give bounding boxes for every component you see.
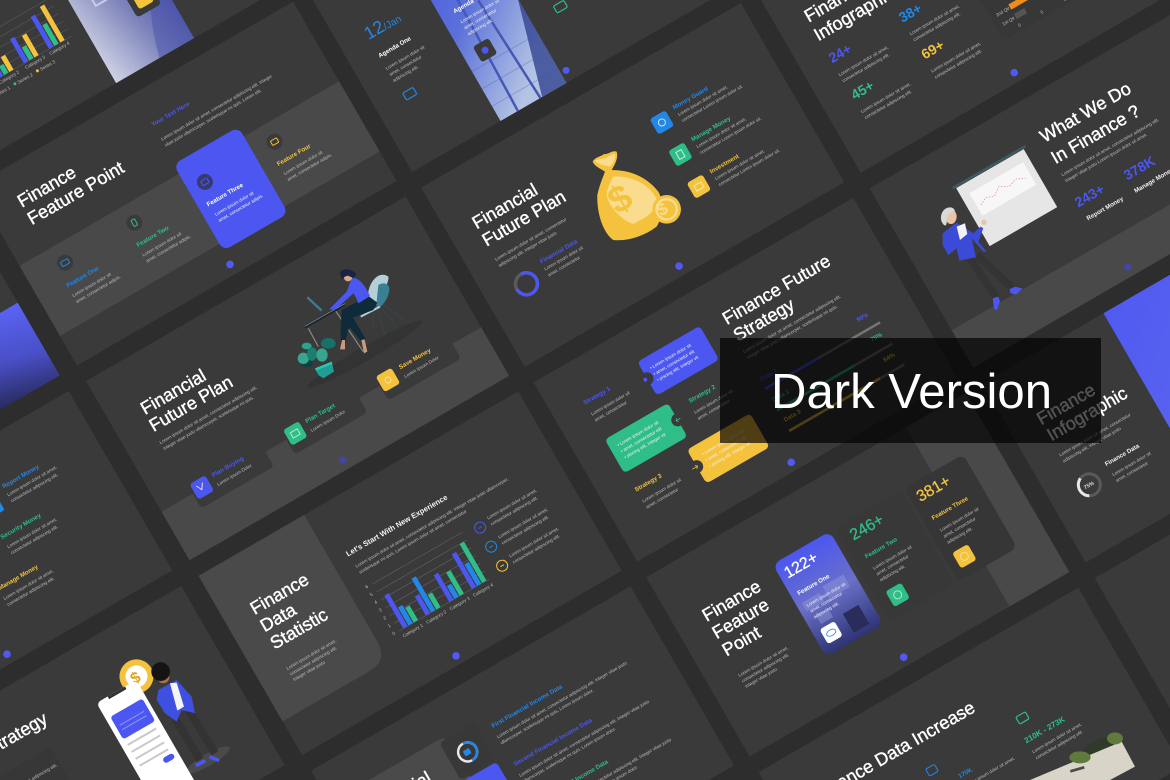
description: adipiscing elit, Integer vitae justo <box>1062 426 1122 463</box>
income 2: Lorem ipsum dolor sit amet, consectetur adipiscing elit. Integer vitae justo <box>518 699 650 778</box>
manage money: Lorem ipsum dolor sit amet, <box>695 116 747 149</box>
bar chart: 5 <box>369 591 374 597</box>
blue ticket: • piscing elit, Integer vit <box>656 354 700 383</box>
bar chart: Category 1 <box>402 623 424 638</box>
progress bars: 90% <box>856 311 870 324</box>
stat manage money: 378K <box>1121 153 1158 183</box>
slide: strategy with phone (bottom left) <box>0 586 285 780</box>
feature three: 381+ <box>914 473 954 506</box>
blue ticket: • Lorem ipsum dolor sit <box>649 342 693 370</box>
slide: finance infographic stats <box>757 0 1170 173</box>
progress bars: Data 1 <box>759 367 779 383</box>
page dot <box>338 455 348 465</box>
report money: consectetur adipiscing elit. <box>10 472 59 503</box>
icon: money bag: $ <box>600 175 639 222</box>
feature three: adipiscing elit. <box>946 526 973 545</box>
investment: Investment <box>709 153 740 175</box>
financial data: Lorem ipsum dolor sit <box>543 245 585 271</box>
bar chart: Category 3 <box>449 596 471 611</box>
icon: money bag: $ <box>653 198 672 220</box>
chart card: 2nd Qtr <box>995 5 1011 18</box>
description: Integer vitae justo ullamcorper, scelerisque mi quis. <box>162 395 255 451</box>
description: Integer vitae justo Lorem ipsum dolor sit amet. <box>1064 132 1148 183</box>
feature two: Lorem ipsum dolor sit <box>872 544 913 571</box>
card: feature one: 122+ <box>781 549 821 582</box>
slide: finance feature point with band <box>0 2 397 365</box>
page dot <box>674 261 684 271</box>
stat 210k: 210K - 273K <box>1023 715 1067 745</box>
title: Finance <box>247 569 312 619</box>
finance data <box>1104 439 1156 484</box>
feature three: Lorem ipsum dolor sit <box>939 506 980 533</box>
feature one: amet, consectetur adipis. <box>75 274 122 304</box>
agenda one: adipiscing elit. <box>392 64 419 83</box>
strategy 3 text: Lorem ipsum dolor sit <box>642 477 683 503</box>
bullet 2: Lorem ipsum dolor sit amet, <box>497 507 549 539</box>
your text here: Lorem ipsum dolor sit amet, consectetur adipiscing elit. Integer <box>160 73 273 142</box>
bar chart: Category 4 <box>472 582 494 598</box>
bar chart: 4 <box>373 599 379 605</box>
stat 24: consectetur adipiscing elit. <box>841 52 890 83</box>
chart grid <box>0 0 72 101</box>
presentation board <box>952 145 1060 248</box>
stat 170k: 170K <box>957 766 974 780</box>
green ticket: • amet, consectetur elit <box>620 426 663 454</box>
security money <box>0 506 61 556</box>
security money: Security Money <box>0 512 43 541</box>
blue ticket <box>634 326 719 398</box>
chart card: 5 <box>1040 9 1045 15</box>
stat 24: 24+ <box>826 40 854 66</box>
green ticket: • Lorem ipsum dolor sit <box>616 420 660 448</box>
bar chart: 1 <box>387 623 392 628</box>
manage money <box>0 558 58 607</box>
slide: finance data statistic <box>199 391 622 755</box>
slide: blue photo (left edge) <box>0 196 60 560</box>
slide: finance data increase <box>759 588 1170 780</box>
stat 69: 69+ <box>918 37 947 62</box>
card: feature one <box>773 531 883 657</box>
stat 38: consectetur adipiscing elit. <box>912 11 961 42</box>
save money card <box>372 331 461 401</box>
icon: green outline <box>553 0 568 13</box>
feature two: amet, consectetur adipis. <box>145 234 192 264</box>
feature three: Feature Three <box>931 495 970 522</box>
stat 170k <box>957 745 1016 780</box>
bullet 3: consectetur adipiscing elit. <box>512 533 561 565</box>
icon: green <box>1016 712 1029 724</box>
feature four: amet, consectetur adipis. <box>286 152 333 182</box>
agenda two text: amet, consectetur <box>463 7 498 30</box>
income 1: Lorem ipsum dolor sit amet, consectetur adipiscing elit. Integer vitae justo <box>496 660 628 739</box>
description: Integer vitae justo ullamcorper, scelerisque mi quis. <box>746 304 839 360</box>
progress bars: 84% <box>882 351 897 364</box>
yellow ticket: • Lorem ipsum dolor sit <box>701 428 745 456</box>
heading: Let's Start With New Experience <box>344 493 449 558</box>
report money: Report Money <box>1 463 41 490</box>
report money: Lorem ipsum dolor sit amet, <box>6 465 58 497</box>
stat report money: Report Money <box>1086 195 1125 222</box>
slide: financial future plan with money bag <box>421 3 844 367</box>
bullet 3: Lorem ipsum dolor sit amet, <box>508 526 560 558</box>
feature three card: Feature Three <box>206 182 245 208</box>
plan buying card: Lorem Ipsum Dolor <box>216 463 253 487</box>
strategy 3 text: Strategy 3 <box>634 472 664 494</box>
stat 210k: consectetur adipiscing elit. <box>1035 729 1084 760</box>
slide: empty (bottom right) <box>1095 394 1170 757</box>
icon: yellow tile <box>123 0 162 18</box>
illustration: man <box>151 662 220 767</box>
feature three card <box>173 127 288 251</box>
feature one: Lorem ipsum dolor sit <box>71 271 113 298</box>
page dot <box>1123 262 1132 272</box>
strategy 1 text: amet, consectetur <box>594 400 628 423</box>
category labels <box>0 40 71 99</box>
category labels: Category 4 <box>48 40 71 56</box>
slide: finance future strategy <box>534 198 957 562</box>
yellow ticket: • piscing elit, Integer vit <box>708 440 752 469</box>
feature two: Feature Two <box>136 225 170 249</box>
date: 12/Jan <box>360 7 404 44</box>
page dot <box>225 259 235 270</box>
stat 45: 45+ <box>848 77 877 103</box>
manage money: consectetur adipiscing elit. <box>6 576 55 607</box>
feature four <box>263 113 333 183</box>
your text here: Your Text Here <box>150 100 192 128</box>
side panel <box>906 393 1069 607</box>
report money <box>1 456 61 503</box>
title <box>1036 78 1146 168</box>
strategy 2 text <box>687 377 738 421</box>
description <box>286 638 344 682</box>
card: feature one: Feature One <box>796 573 831 597</box>
description: adipiscing elit, Integer vitae justo <box>497 230 558 268</box>
stat 69 <box>918 20 985 80</box>
text: scelerisque mi quis, Lorem ipsum dolor sit amet, consectetur <box>358 508 468 575</box>
photo <box>1103 199 1170 493</box>
description: consectetur adipiscing elit, <box>741 652 790 683</box>
plan buying card <box>185 439 274 509</box>
money guard <box>649 70 744 136</box>
bullet 1: consectetur adipiscing elit. <box>490 495 539 526</box>
description: Integer vitae justo <box>744 666 778 689</box>
description: Lorem ipsum dolor sit amet, <box>738 645 789 678</box>
finance data: Finance Data <box>1104 442 1141 468</box>
slide: agenda with building <box>309 0 732 172</box>
feature one <box>52 235 122 304</box>
description <box>738 645 796 689</box>
plan target card <box>279 385 367 455</box>
feature three card: Lorem ipsum dolor sit <box>214 190 255 217</box>
money guard: consectetur Lorem ipsum dolor sit. <box>680 84 744 123</box>
save money card: Save Money <box>398 347 433 371</box>
strategy 2 text: Strategy 2 <box>687 383 717 405</box>
bars <box>0 5 65 93</box>
title <box>699 576 784 660</box>
slide: bar chart with photo (top left) <box>0 0 284 171</box>
page dot <box>898 652 909 662</box>
income 1: First Financial Income Data <box>491 683 564 730</box>
legend: Series 3 <box>39 59 56 72</box>
title: Future Plan <box>146 372 236 436</box>
investment: Lorem ipsum dolor sit amet, <box>714 148 766 181</box>
band <box>20 81 380 336</box>
manage money: Lorem ipsum dolor sit amet, <box>3 568 54 601</box>
feature two <box>123 195 192 264</box>
title: Feature Point <box>24 157 127 229</box>
title: Strategy <box>730 295 798 345</box>
title: Data <box>257 599 300 636</box>
title: Financial <box>137 365 209 419</box>
manage money: Manage Money <box>690 115 733 143</box>
title: What We Do <box>1036 78 1134 146</box>
financial data: amet, consectetur <box>547 255 581 278</box>
page dot <box>451 651 461 661</box>
strategy 3 text <box>634 465 686 510</box>
legend <box>0 59 56 100</box>
description: Lorem ipsum dolor sit amet, consectetur adipiscing elit, <box>742 294 842 354</box>
yellow ticket <box>683 413 770 486</box>
your text here <box>150 58 277 148</box>
feature two: adipiscing elit. <box>879 564 906 582</box>
stat 69: consectetur adipiscing elit. <box>934 48 983 80</box>
left panel <box>199 515 388 721</box>
card: feature one: Lorem ipsum dolor sit <box>806 581 847 608</box>
description: Lorem ipsum dolor sit amet, consectetur <box>494 216 568 262</box>
stat 69: Lorem ipsum dolor sit amet, <box>930 41 982 73</box>
title: Finance <box>14 162 79 211</box>
bullet 3 <box>494 526 564 573</box>
bar chart: 0 <box>391 630 397 636</box>
slide: financial future plan with desk illustration <box>86 197 509 560</box>
banner text: Dark Version <box>771 365 1052 419</box>
title: Finance <box>699 576 764 625</box>
feature three <box>914 467 1001 570</box>
finance data: amet, consectetur <box>1115 460 1149 483</box>
manage money <box>668 102 762 169</box>
title: Finance Future <box>719 251 834 329</box>
investment: consectetur Lorem ipsum dolor sit. <box>717 148 781 187</box>
title: In Finance ? <box>1048 101 1143 168</box>
title: Finance <box>1033 380 1099 429</box>
bar chart: Category 2 <box>425 609 448 625</box>
green ticket <box>605 401 690 473</box>
investment <box>686 134 781 201</box>
money guard: Money Guard <box>672 85 710 111</box>
slide: what we do in finance <box>870 4 1170 368</box>
bar chart: 6 <box>364 584 370 590</box>
illustration: coin <box>113 653 160 700</box>
description: consectetur adipiscing elit. <box>289 645 338 676</box>
income 1: ullamcorper, scelerisque mi quis, Lorem ipsum dolor. <box>499 688 595 745</box>
bullet 1: Lorem ipsum dolor sit amet, <box>486 488 538 520</box>
legend: Series 2 <box>16 72 34 85</box>
feature two: 246+ <box>847 511 887 544</box>
your text here: vitae justo ullamcorper, scelerisque mi quis, Lorem elit. <box>164 88 263 148</box>
stat 24: Lorem ipsum dolor sit amet, <box>838 45 889 77</box>
card: dark three <box>904 454 1017 582</box>
left panel <box>330 735 531 780</box>
money guard: Lorem ipsum dolor sit amet, <box>677 84 729 117</box>
page dot <box>786 457 796 468</box>
chart card: 0 <box>1017 22 1022 28</box>
card: feature one: amet, consectetur <box>809 591 843 613</box>
title: Infographic <box>1044 383 1131 445</box>
feature two: Lorem ipsum dolor sit <box>142 231 183 257</box>
stat manage money <box>1121 146 1170 195</box>
building photo <box>397 0 566 121</box>
strategy 2 text: Lorem ipsum dolor sit <box>693 388 734 415</box>
blue ticket: • amet, consectetur elit <box>652 348 696 376</box>
feature two <box>847 506 934 608</box>
security money: Lorem ipsum dolor sit amet, <box>6 517 58 549</box>
icon: blue <box>0 500 5 515</box>
agenda one: amet, consectetur <box>388 54 423 77</box>
page dot <box>2 649 12 659</box>
agenda two text <box>452 0 508 37</box>
strategy 3 text: amet, consectetur <box>645 487 680 510</box>
stat 210k <box>1023 709 1086 761</box>
feature two: Feature Two <box>864 536 899 560</box>
photo: planter with foliage <box>1030 732 1135 780</box>
card: dark two <box>835 490 955 622</box>
page dot <box>1009 67 1019 78</box>
plan target card: Lorem Ipsum Dolor <box>310 409 346 433</box>
band <box>162 327 509 560</box>
description card <box>0 747 75 780</box>
progress ring: 75% <box>1083 480 1096 491</box>
band <box>952 146 1170 368</box>
progress bars <box>757 308 905 432</box>
feature three: amet, consectetur <box>942 516 977 539</box>
bar chart: 3 <box>378 607 383 613</box>
slide: finance feature point cards <box>646 393 1069 757</box>
stat 210k: Lorem ipsum dolor sit amet, <box>1031 722 1083 754</box>
description: Integer vitae justo <box>292 659 326 682</box>
bar chart <box>364 529 494 642</box>
stat 38: Lorem ipsum dolor sit amet, <box>909 4 960 36</box>
stat 38: 38+ <box>896 0 924 25</box>
icon: dark tile <box>473 38 497 62</box>
slide: first financial income data <box>311 586 734 780</box>
bullet 1 <box>472 488 542 535</box>
bullet 2 <box>483 507 553 554</box>
progress bars: 75% <box>869 331 884 344</box>
progress ring <box>511 269 541 299</box>
security money: consectetur adipiscing elit. <box>10 524 59 555</box>
stat 45: consectetur adipiscing elit. <box>864 89 913 120</box>
stat report money <box>1072 175 1125 223</box>
icon: agenda one <box>403 87 417 100</box>
title: Financial <box>469 180 541 233</box>
feature four: Feature Four <box>276 143 313 168</box>
blue card <box>462 762 518 780</box>
icon: money bag <box>593 151 681 240</box>
illustration: ground <box>183 742 232 778</box>
stat 45: Lorem ipsum dolor sit amet, <box>860 81 912 114</box>
chart card <box>952 0 1151 41</box>
finance data: Lorem ipsum dolor sit <box>1111 450 1152 477</box>
income 2: Second Financial Income Data <box>513 717 594 768</box>
green ticket: • piscing elit, Integer vit <box>623 432 667 460</box>
agenda one: Agenda One <box>377 35 413 60</box>
financial data: Financial Data <box>539 238 579 265</box>
plan buying card: Plan Buying <box>211 455 245 479</box>
category labels: Category 3 <box>24 54 46 70</box>
stat report money: 243+ <box>1072 181 1107 210</box>
description: Lorem ipsum dolor sit amet, consectetur adipiscing elit, <box>159 385 258 445</box>
save money card: Lorem Ipsum Dolor <box>403 355 440 379</box>
description: Lorem ipsum dolor sit amet, <box>286 638 337 671</box>
feature four: Lorem ipsum dolor sit <box>283 149 324 176</box>
dark version banner <box>720 338 1101 443</box>
photo <box>0 303 60 460</box>
icon: blue <box>926 764 938 776</box>
title: Point <box>719 622 764 660</box>
feature two: amet, consectetur <box>875 554 910 576</box>
page dot <box>561 66 571 75</box>
manage money: consectetur Lorem ipsum dolor sit. <box>699 116 762 155</box>
card: feature one: adipiscing elit. <box>812 601 840 620</box>
plan target card: Plan Target <box>304 402 337 425</box>
ring card <box>439 723 495 780</box>
photo <box>13 0 194 83</box>
progress bars: Data 2 <box>771 388 791 404</box>
illustration: coin: $ <box>128 669 144 688</box>
slide: finance infographic with ring <box>982 199 1170 563</box>
stat 24 <box>826 24 893 83</box>
bar chart: 2 <box>382 615 388 621</box>
title: Feature <box>709 594 772 643</box>
progress ring <box>1069 464 1110 505</box>
yellow ticket: • amet, consectetur elit <box>704 435 748 462</box>
title <box>247 569 332 653</box>
slide: report money list (left edge) <box>0 391 172 755</box>
illustration: phone <box>96 680 197 780</box>
ground shadow <box>304 315 426 393</box>
feature one: Feature One <box>65 265 101 289</box>
strategy 1 text: Strategy 1 <box>582 385 612 407</box>
stat 38 <box>896 0 964 43</box>
description: Lorem ipsum dolor sit amet, consectetur adipiscing elit, <box>1061 117 1160 177</box>
title: Future Plan <box>479 186 569 250</box>
agenda one: Lorem ipsum dolor sit <box>385 44 426 71</box>
bullet 2: consectetur adipiscing elit. <box>501 514 550 546</box>
illustration: woman at desk <box>298 269 407 378</box>
title: Statistic <box>267 604 331 653</box>
strategy 1 text <box>582 378 635 423</box>
stat 45 <box>848 61 915 120</box>
strategy 1 text: Lorem ipsum dolor sit <box>590 390 631 416</box>
chart card: 1st Qtr <box>1001 15 1016 27</box>
text: Lorem ipsum dolor sit amet, consectetur adipiscing elit. Integer vitae justo ullamcorper, <box>355 476 509 569</box>
illustration: woman presenting <box>941 207 1023 311</box>
agenda one <box>377 31 433 83</box>
strategy 2 text: amet, consectetur <box>697 398 731 421</box>
feature three card: amet, consectetur adipis. <box>217 193 264 223</box>
financial data <box>539 237 588 278</box>
progress bars: Data 3 <box>783 408 803 424</box>
agenda two text: adipiscing elit. <box>467 18 494 36</box>
description: Lorem ipsum dolor sit amet, consectetur <box>1058 412 1132 457</box>
